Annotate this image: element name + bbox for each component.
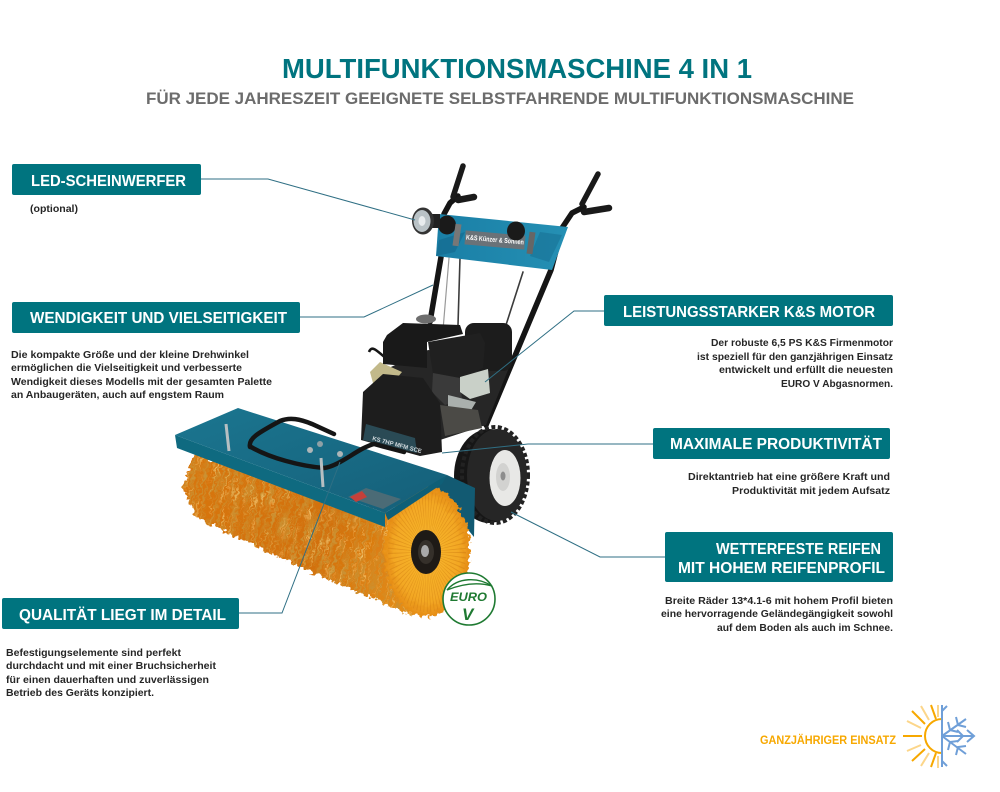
warning sticker — [348, 488, 401, 509]
callout: Qualität liegt im Detail: QUALITÄT LIEGT IM DETAIL — [19, 606, 226, 624]
callout: Maximale Produktivität: MAXIMALE PRODUKTIVITÄT — [670, 435, 882, 453]
subtitle: FÜR JEDE JAHRESZEIT GEEIGNETE SELBSTFAHRENDE MULTIFUNKTIONSMASCHINE — [146, 89, 854, 108]
icon: snowflake — [942, 705, 974, 767]
callout: Maximale Produktivität: Direktantrieb hat eine größere Kraft und — [688, 471, 890, 483]
engine — [361, 314, 512, 456]
handlebar frame — [430, 166, 609, 425]
callout: Leistungsstarker Motor: ist speziell für den ganzjährigen Einsatz — [697, 351, 893, 363]
callout: LED-Scheinwerfer: (optional) — [30, 204, 78, 215]
sweeper deck — [175, 408, 447, 527]
callout: Wendigkeit und Vielseitigkeit: an Anbaugeräten, auch auf engstem Raum — [11, 389, 224, 401]
year-round badge — [760, 705, 974, 768]
callout: Qualität liegt im Detail: für einen dauerhaften und zuverlässigen — [6, 674, 209, 686]
icon: sun — [903, 705, 942, 768]
callout: Leistungsstarker Motor: Der robuste 6,5 PS K&S Firmenmotor — [711, 337, 893, 349]
engine: KS 7HP MFM SCE — [371, 436, 422, 455]
callout: Qualität liegt im Detail: Befestigungselemente sind perfekt — [6, 647, 181, 659]
brush — [181, 454, 472, 620]
callout: Wetterfeste Reifen: MIT HOHEM REIFENPROFIL — [678, 560, 885, 577]
callout: Wendigkeit und Vielseitigkeit: Wendigkeit dieses Modells mit der gesamten Palette — [11, 376, 272, 388]
callout: LED-Scheinwerfer: LED-SCHEINWERFER — [31, 173, 186, 190]
LED lamp — [412, 208, 440, 234]
callout: Qualität liegt im Detail: Betrieb des Geräts konzipiert. — [6, 687, 154, 699]
machine illustration — [175, 163, 612, 626]
callout: LED-Scheinwerfer — [12, 164, 415, 220]
title: MULTIFUNKTIONSMASCHINE 4 IN 1 — [282, 53, 752, 84]
callout: Wetterfeste Reifen: auf dem Boden als auch im Schnee. — [717, 622, 893, 634]
Euro V badge: V — [462, 605, 475, 624]
control panel — [436, 214, 568, 270]
year-round label: GANZJÄHRIGER EINSATZ — [760, 732, 896, 747]
deck side plate — [420, 475, 475, 537]
Euro V badge: EURO — [450, 592, 487, 604]
callout: Wetterfeste Reifen: WETTERFESTE REIFEN — [716, 541, 881, 558]
callout: Wendigkeit und Vielseitigkeit: ermöglichen die Vielseitigkeit und verbesserte — [11, 362, 242, 374]
callout: Qualität liegt im Detail — [2, 462, 340, 699]
Euro V badge — [443, 573, 495, 625]
callout: Leistungsstarker Motor: LEISTUNGSSTARKER K&S MOTOR — [623, 304, 875, 321]
callout: Leistungsstarker Motor: entwickelt und erfüllt die neuesten — [719, 364, 893, 376]
callout: Wendigkeit und Vielseitigkeit: Die kompakte Größe und der kleine Drehwinkel — [11, 349, 249, 361]
brush end disc — [384, 487, 470, 617]
callout: Wendigkeit und Vielseitigkeit: WENDIGKEIT UND VIELSEITIGKEIT — [30, 310, 287, 327]
callout: Wetterfeste Reifen: Breite Räder 13*4.1-6 mit hohem Profil bieten — [665, 595, 893, 607]
callout: Wendigkeit und Vielseitigkeit — [11, 285, 433, 401]
callout: Qualität liegt im Detail: durchdacht und mit einer Bruchsicherheit — [6, 660, 216, 672]
control panel: K&S Künzer & Sonnen — [466, 234, 524, 247]
callout: Leistungsstarker Motor: EURO V Abgasnormen. — [781, 378, 893, 390]
callout: Maximale Produktivität: Produktivität mit jedem Aufsatz — [732, 485, 890, 497]
callout: Leistungsstarker Motor — [485, 295, 893, 390]
callout: Maximale Produktivität — [442, 428, 890, 497]
wheel — [454, 427, 528, 523]
callout: Wetterfeste Reifen: eine hervorragende Geländegängigkeit sowohl — [661, 608, 893, 620]
callout: Wetterfeste Reifen — [511, 512, 893, 634]
